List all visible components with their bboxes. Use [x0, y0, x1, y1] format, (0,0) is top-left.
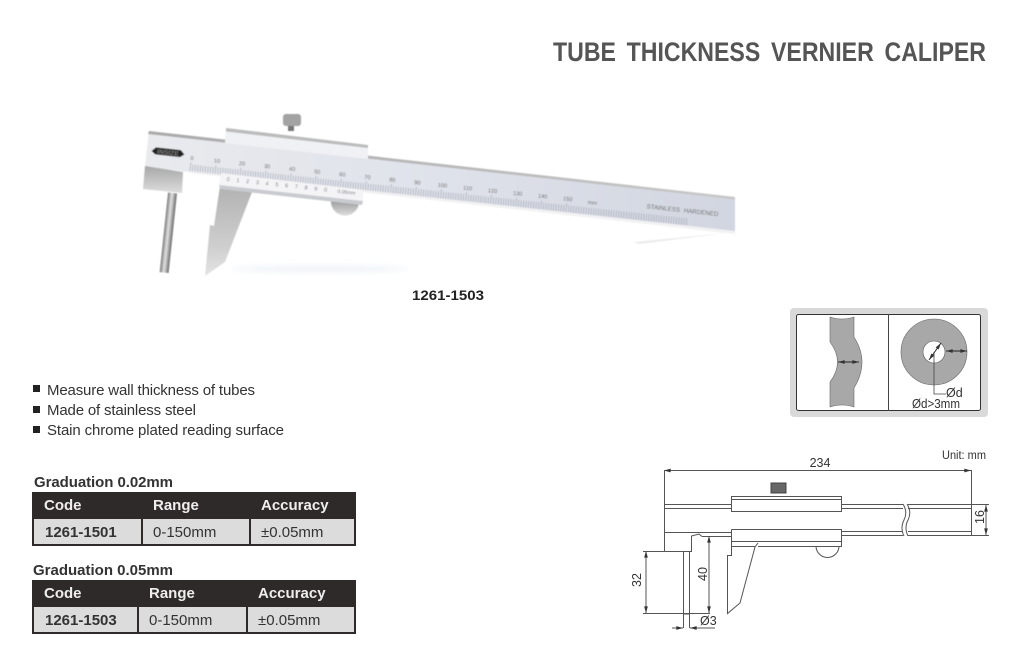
- main scale: 70: [364, 175, 371, 181]
- slider outline: [731, 496, 842, 546]
- table: graduation 0.02mm: ±0.05mm: [261, 524, 323, 541]
- vernier numbers: 2: [246, 179, 249, 185]
- panel background: [790, 308, 988, 417]
- INSIZE logo: INSIZE: [157, 149, 180, 158]
- slider top bar: [225, 128, 368, 159]
- thumb wheel: [331, 200, 359, 216]
- dimension 40: [708, 536, 710, 613]
- product photo: vernier caliper: [143, 114, 735, 276]
- table: graduation 0.05mm: Accuracy: [258, 585, 326, 602]
- main scale: mm: [587, 200, 598, 207]
- table: graduation 0.02mm: Range: [153, 497, 199, 514]
- table: graduation 0.05mm: Code: [44, 585, 82, 602]
- tube wall section: [830, 317, 862, 407]
- main scale: 80: [389, 177, 396, 184]
- label: 16: 16: [973, 510, 987, 524]
- diameter label: Ød: [946, 386, 963, 400]
- table: graduation 0.02mm: [32, 492, 356, 546]
- beam bottom edge: [190, 170, 735, 234]
- table: graduation 0.02mm: Accuracy: [261, 497, 329, 514]
- main scale: 120: [488, 188, 497, 195]
- tube cross-section: [901, 319, 967, 394]
- main scale: 20: [239, 161, 245, 168]
- vernier numbers: 8: [304, 185, 308, 192]
- shadow under caliper: [230, 266, 410, 272]
- main scale: 50: [314, 169, 321, 176]
- main scale: 130: [513, 191, 523, 198]
- minimum diameter label: Ød>3mm: [912, 397, 960, 411]
- feature 2: Made of stainless steel: [47, 402, 196, 419]
- INSIZE logo: [151, 147, 185, 159]
- heading: graduation 0.05mm: Graduation 0.05mm: [33, 562, 173, 579]
- pin outline: [684, 551, 690, 628]
- table: graduation 0.05mm: 1261-1503: [45, 612, 117, 629]
- slider top edge: [226, 128, 368, 148]
- vernier numbers: 4: [265, 181, 269, 187]
- label: overall length: 234: [810, 456, 830, 470]
- vernier numbers: [226, 177, 356, 197]
- main scale: HARDENED: [683, 207, 719, 218]
- main scale: 10: [214, 158, 220, 165]
- panel frame: [796, 314, 980, 410]
- label: 40: 40: [696, 567, 710, 581]
- vernier numbers: 6: [285, 183, 288, 190]
- vernier numbers: 9: [314, 186, 318, 193]
- main scale: [189, 154, 719, 225]
- heading: graduation 0.02mm: Graduation 0.02mm: [34, 474, 173, 491]
- moving jaw: [205, 186, 252, 276]
- dimension pin diameter: [672, 627, 715, 629]
- feature 3: Stain chrome plated reading surface: [47, 422, 284, 439]
- vernier numbers: 5: [275, 182, 279, 188]
- table: graduation 0.02mm: Code: [44, 497, 82, 514]
- wall thickness arrow: [838, 361, 859, 363]
- thumb wheel outline: [816, 546, 839, 558]
- vernier plate: [219, 173, 363, 201]
- feature list: [33, 382, 284, 439]
- locking screw: [283, 114, 301, 131]
- dimension 32: [643, 551, 710, 614]
- table: graduation 0.05mm: ±0.05mm: [258, 612, 320, 629]
- fixed jaw outline: [664, 534, 702, 552]
- vernier numbers: 3: [255, 180, 259, 186]
- moving jaw outline: [728, 536, 758, 614]
- vernier numbers: 1: [236, 178, 240, 184]
- beam shadow line: [633, 233, 727, 244]
- locking knob: [771, 483, 786, 493]
- main scale: 90: [414, 180, 421, 187]
- vernier numbers: 0: [226, 177, 230, 183]
- table: graduation 0.05mm: 0-150mm: [149, 612, 212, 629]
- label: unit: Unit: mm: [942, 450, 986, 462]
- main scale: 60: [339, 172, 346, 179]
- main scale: 30: [264, 164, 270, 170]
- table: graduation 0.05mm: Range: [149, 585, 195, 602]
- technical drawing: [643, 470, 989, 628]
- main beam: [145, 131, 735, 233]
- label: 32: 32: [630, 573, 644, 587]
- vernier numbers: 7: [294, 184, 298, 191]
- main scale: 110: [463, 185, 472, 192]
- measuring pin: [160, 193, 177, 273]
- beam top edge: [148, 131, 735, 200]
- measurement diagram panel: [790, 308, 988, 417]
- table: graduation 0.02mm: 0-150mm: [153, 524, 216, 541]
- main scale: 150: [563, 196, 573, 203]
- vernier numbers: 0: [324, 187, 327, 194]
- slider lower edge: [219, 185, 363, 205]
- panel divider: [888, 314, 890, 411]
- table: graduation 0.02mm: 1261-1501: [45, 524, 117, 541]
- beam outline: [664, 504, 971, 536]
- overall length dimension: [664, 470, 972, 551]
- label: pin diameter: Ø3: [700, 614, 717, 628]
- main scale: 40: [289, 167, 296, 173]
- main scale: STAINLESS: [646, 203, 680, 214]
- table: graduation 0.05mm: [32, 580, 356, 634]
- feature 1: Measure wall thickness of tubes: [47, 382, 255, 399]
- main scale: 0: [190, 156, 194, 162]
- main scale: 140: [538, 194, 548, 201]
- fixed jaw block: [143, 166, 183, 193]
- vernier numbers: 0.05mm: [337, 189, 356, 197]
- photo caption: 1261-1503: [412, 287, 484, 303]
- dimension 16: [971, 504, 989, 536]
- main scale: 100: [437, 183, 447, 190]
